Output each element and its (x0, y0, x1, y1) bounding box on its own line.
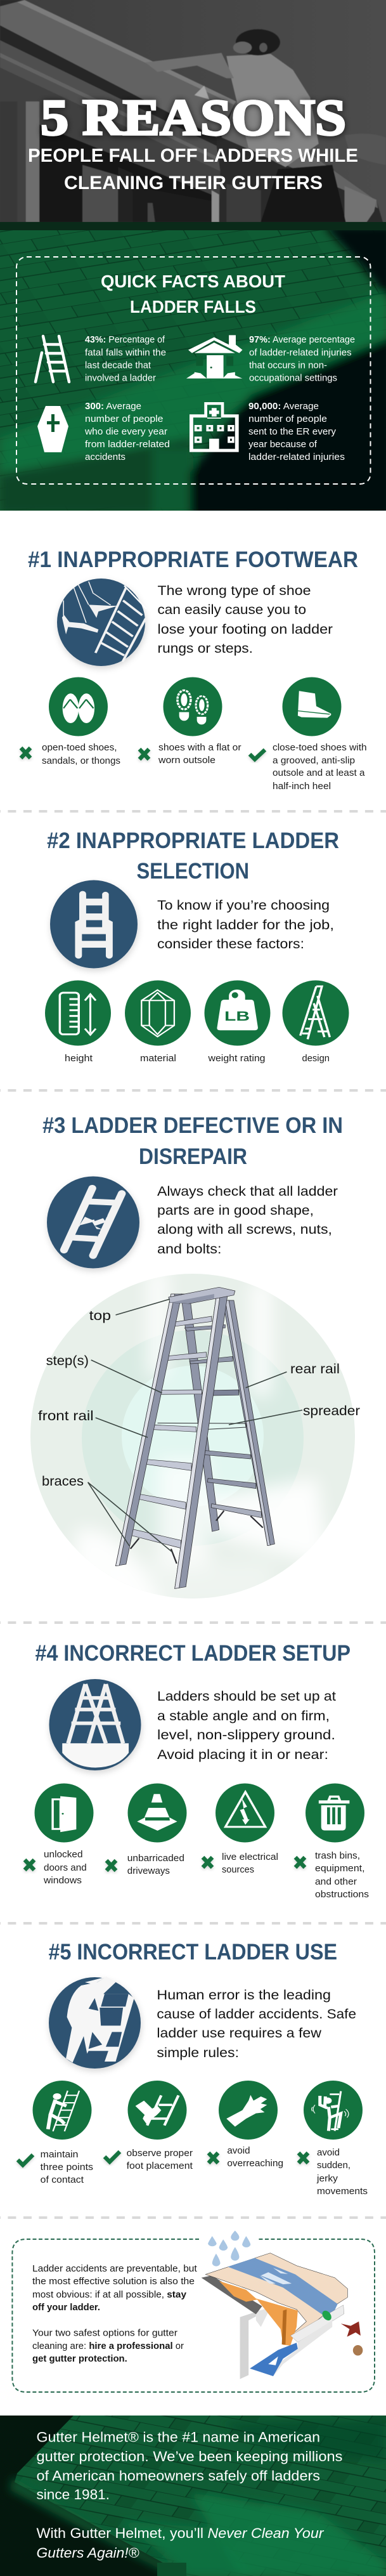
dashed frame (12, 2239, 375, 2392)
section 1: footwear (21, 547, 367, 792)
intro text (157, 1988, 356, 2060)
intro text: parts are in good shape, (157, 1203, 314, 1218)
factor: material (125, 981, 191, 1064)
item: open-toed shoes: sandals, or thongs (42, 756, 120, 766)
part labels: braces (42, 1474, 84, 1489)
fact: 90,000: ladder-related injuries (248, 452, 345, 462)
intro text: To know if you’re choosing (157, 898, 330, 913)
item: flat outsole: worn outsole (158, 755, 216, 766)
rule: avoid overreaching: avoid (227, 2146, 250, 2156)
hero photo panel (0, 0, 386, 233)
hazard: doors: windows (43, 1876, 82, 1886)
panel: footer (0, 2416, 386, 2576)
footer text: gutter protection. We’ve been keeping millions (37, 2449, 342, 2464)
intro text: can easily cause you to (157, 603, 306, 617)
icon: broken ladder (47, 1176, 139, 1269)
pointer lines (88, 1299, 302, 1552)
part labels: spreader (303, 1404, 360, 1418)
rule: avoid jerky movements: jerky (316, 2174, 338, 2184)
fact: 97%: 97%: Average percentage (249, 334, 355, 345)
subtitle: PEOPLE FALL OFF LADDERS WHILE (28, 145, 358, 166)
footer text: of American homeowners safely off ladders (37, 2468, 320, 2484)
intro text: lose your footing on ladder (157, 622, 333, 637)
section 5: ladder use (18, 1940, 368, 2197)
heading: #3 LADDER DEFECTIVE OR IN (42, 1113, 343, 1138)
heading: #1 INAPPROPRIATE FOOTWEAR (28, 547, 358, 572)
fact: 43%: 43%: Percentage of (85, 334, 165, 345)
intro text: Human error is the leading (157, 1988, 331, 2003)
heading: #5 INCORRECT LADDER USE (48, 1940, 337, 1965)
hazard: trash bins: obstructions (315, 1890, 369, 1900)
callout text: most obvious: if at all possible, stay (32, 2289, 187, 2300)
heading: #4 INCORRECT LADDER SETUP (35, 1641, 351, 1666)
fact: 300: number of people (85, 414, 164, 424)
rule: avoid jerky movements: avoid (317, 2148, 340, 2158)
intro text: ladder use requires a few (157, 2026, 322, 2041)
front steps (125, 1316, 212, 1564)
rule: avoid jerky movements: movements (317, 2187, 368, 2197)
panel: quick facts (0, 225, 386, 517)
hazard: trash bins (295, 1784, 369, 1900)
rule: foot placement (105, 2081, 193, 2171)
fact: 300: who die every year (84, 426, 167, 437)
icon: house (186, 335, 242, 379)
factor: weight rating: LB (224, 1009, 250, 1024)
icon: climber (49, 1977, 141, 2069)
footer text (37, 2429, 342, 2561)
hazard: electrical: sources (222, 1865, 254, 1875)
item: close-toed shoes: close-toed shoes with (273, 743, 367, 753)
fact: 97%: of ladder-related injuries (249, 347, 352, 358)
footer shingle background (0, 2416, 386, 2576)
fact: 300: accidents (85, 452, 125, 462)
quick facts heading (101, 271, 285, 317)
footer text: With Gutter Helmet, you’ll Never Clean Your (37, 2525, 325, 2541)
intro text: The wrong type of shoe (157, 584, 311, 598)
part labels: step(s) (46, 1354, 89, 1368)
intro text: and bolts: (157, 1242, 222, 1257)
callout text: Ladder accidents are preventable, but (32, 2263, 198, 2274)
heading (42, 1113, 343, 1169)
dashed frame (16, 257, 370, 484)
intro text: rungs or steps. (157, 641, 253, 656)
item: flat outsole: shoes with a flat or (158, 743, 241, 753)
fact: 300 (84, 401, 170, 462)
rule: avoid overreaching (209, 2081, 283, 2169)
callout text: the most effective solution is also the (32, 2276, 195, 2287)
rule: three points of contact: three points (41, 2162, 93, 2173)
section 4: ladder setup (25, 1641, 369, 1900)
icon: coffin (37, 406, 68, 452)
fact: 90,000: 90,000: Average (248, 401, 319, 412)
icon: ladder on ground (49, 1679, 141, 1770)
intro text: Avoid placing it in or near: (157, 1748, 328, 1762)
intro text (157, 1689, 336, 1762)
callout text: Your two safest options for gutter (32, 2328, 177, 2338)
front rails (116, 1294, 228, 1588)
subtitle: CLEANING THEIR GUTTERS (64, 173, 323, 193)
rule: three points of contact: maintain (41, 2150, 79, 2160)
hazard: driveways (106, 1784, 186, 1876)
rule: foot placement: foot placement (127, 2161, 193, 2171)
item: close-toed shoes (250, 677, 367, 792)
intro text (157, 584, 333, 656)
part labels: top (89, 1309, 111, 1323)
callout text: off your ladder. (32, 2302, 100, 2313)
hazard: electrical: live electrical (222, 1852, 278, 1862)
hazard: trash bins: and other (315, 1877, 357, 1887)
rule: three points of contact (18, 2081, 93, 2185)
item: close-toed shoes: half-inch heel (273, 781, 331, 792)
icon: ladder (35, 336, 69, 382)
top platform (169, 1287, 235, 1304)
fact: 300: 300: Average (85, 401, 141, 412)
ladder diagram (88, 1287, 302, 1588)
fact: 43%: involved a ladder (85, 373, 156, 384)
section 2: ladder selection (45, 828, 349, 1064)
part labels: rear rail (290, 1362, 340, 1376)
callout text: get gutter protection. (32, 2353, 127, 2364)
panel: prevention callout (12, 2231, 375, 2392)
subtitle (28, 145, 358, 193)
item: close-toed shoes: a grooved, anti-slip (273, 756, 355, 766)
footer text: Gutters Again!® (37, 2545, 139, 2561)
green shingle background (0, 225, 386, 517)
item: flat outsole (139, 677, 241, 766)
fact: 90,000 (248, 401, 345, 462)
icon: hospital (190, 402, 239, 452)
fact: 90,000: year because of (248, 439, 318, 450)
intro text: Always check that all ladder (157, 1184, 338, 1199)
fact: 97%: that occurs in non- (249, 360, 327, 371)
intro text: simple rules: (157, 2046, 239, 2060)
fact: 43% (85, 334, 166, 384)
factor: weight rating: weight rating (207, 1054, 265, 1064)
part labels (38, 1309, 360, 1489)
callout text (32, 2263, 198, 2364)
intro text: Ladders should be set up at (157, 1689, 336, 1704)
hero title (28, 90, 358, 193)
rule: foot placement: observe proper (127, 2148, 193, 2159)
icon: shoes on ladder (57, 579, 146, 666)
hazard: trash bins: trash bins, (315, 1851, 360, 1861)
intro text (157, 1184, 338, 1257)
item: open-toed shoes: open-toed shoes, (42, 743, 117, 753)
item: close-toed shoes: outsole and at least a (273, 768, 365, 778)
spreader (158, 1423, 246, 1429)
rule: avoid overreaching: overreaching (227, 2159, 283, 2169)
hazard: driveways: driveways (127, 1866, 170, 1876)
intro text (157, 898, 334, 951)
quick facts heading: QUICK FACTS ABOUT (101, 271, 285, 291)
heading: SELECTION (137, 859, 249, 884)
green band (0, 222, 386, 230)
fact: 90,000: number of people (248, 414, 327, 424)
intro text: the right ladder for the job, (157, 918, 334, 932)
factor: design: design (302, 1054, 330, 1064)
gutter illustration (202, 2231, 363, 2379)
heading: DISREPAIR (139, 1144, 247, 1169)
factor: weight rating (204, 981, 270, 1064)
hazard: doors: doors and (44, 1863, 87, 1873)
fact: 97%: occupational settings (249, 373, 337, 384)
callout text: cleaning are: hire a professional or (32, 2341, 184, 2351)
heading: #2 INAPPROPRIATE LADDER (47, 828, 339, 853)
fact: 97% (249, 334, 355, 384)
fact: 300: from ladder-related (85, 439, 170, 450)
section 3: defective ladder (30, 1113, 360, 1611)
hazard: electrical (203, 1784, 278, 1875)
item: open-toed shoes (21, 677, 120, 766)
hazard: doors (25, 1784, 94, 1886)
hazard: trash bins: equipment, (315, 1864, 365, 1874)
fact: 43%: fatal falls within the (85, 347, 166, 358)
factor: material: material (140, 1054, 176, 1064)
icon: ladder (50, 880, 138, 968)
hazard: driveways: unbarricaded (127, 1854, 184, 1864)
part labels: front rail (38, 1409, 94, 1423)
factor: height: height (65, 1054, 93, 1064)
footer text: Gutter Helmet® is the #1 name in American (37, 2429, 320, 2445)
intro text: level, non-slippery ground. (157, 1728, 335, 1742)
ladder backdrop circles (30, 1269, 355, 1611)
fact: 90,000: sent to the ER every (248, 426, 337, 437)
rain drops (208, 2231, 250, 2266)
rule: avoid jerky movements (299, 2081, 368, 2197)
footer text: since 1981. (37, 2487, 110, 2502)
intro text: consider these factors: (157, 937, 304, 951)
heading (47, 828, 339, 884)
quick facts heading: LADDER FALLS (130, 297, 256, 317)
fact: 43%: last decade that (85, 360, 151, 371)
rule: three points of contact: of contact (41, 2175, 84, 2185)
intro text: along with all screws, nuts, (157, 1222, 332, 1237)
factor: design (283, 981, 349, 1064)
rule: avoid jerky movements: sudden, (317, 2161, 351, 2171)
hazard: doors: unlocked (44, 1850, 82, 1860)
intro text: cause of ladder accidents. Safe (157, 2007, 356, 2022)
intro text: a stable angle and on firm, (157, 1709, 330, 1723)
factor: height (45, 981, 111, 1064)
main title: 5 REASONS (41, 90, 346, 146)
rear rails and steps (181, 1294, 274, 1546)
